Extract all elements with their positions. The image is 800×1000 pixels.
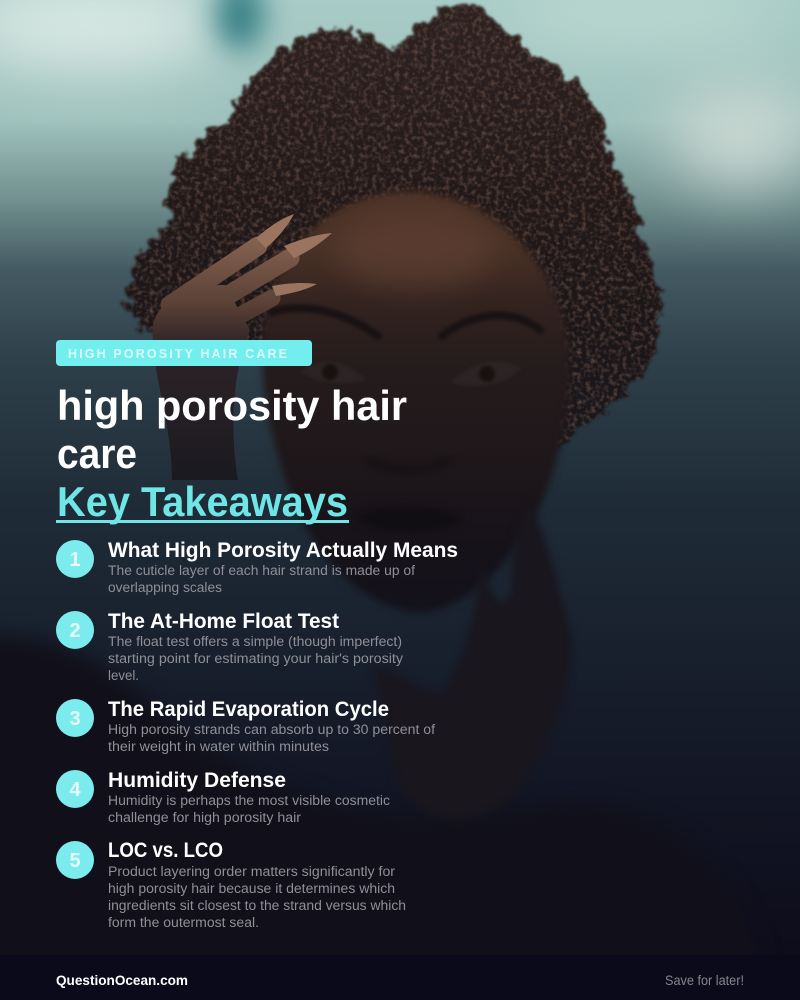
title: Key Takeaways (57, 478, 348, 525)
description 4: Humidity is perhaps the most visible cosmetic (108, 793, 390, 808)
description 3: High porosity strands can absorb up to 30 percent of (108, 722, 435, 737)
eyebrows (272, 308, 540, 336)
number badge 5 (56, 841, 94, 879)
number badge 4: 4 (69, 779, 81, 801)
fingers (170, 246, 290, 332)
takeaway 3 (56, 698, 435, 754)
description 5 (108, 864, 406, 930)
title: care (57, 430, 137, 477)
lips (352, 506, 466, 534)
heading 5: LOC vs. LCO (108, 839, 223, 862)
palm and wrist (153, 285, 250, 480)
nose (362, 458, 455, 474)
tag pill (56, 340, 312, 366)
footer bar (0, 955, 800, 1000)
description 1: The cuticle layer of each hair strand is made up of (108, 563, 415, 578)
shoulders and chest (0, 636, 765, 970)
description 4: challenge for high porosity hair (108, 810, 302, 825)
title: high porosity hair (57, 382, 407, 429)
heading 2: The At-Home Float Test (108, 610, 339, 633)
site name: QuestionOcean.com (56, 972, 188, 988)
description 3 (108, 722, 435, 754)
description 5: high porosity hair because it determines which (108, 881, 395, 896)
description 5: ingredients sit closest to the strand versus which (108, 898, 406, 913)
takeaway 4 (56, 769, 390, 825)
face (262, 192, 569, 612)
hair (127, 6, 661, 445)
description 5: Product layering order matters significantly for (108, 864, 396, 879)
description 3: their weight in water within minutes (108, 739, 329, 754)
forehead highlight (335, 212, 495, 288)
number badge 3 (56, 699, 94, 737)
number badge 3: 3 (69, 708, 81, 730)
description 5: form the outermost seal. (108, 915, 259, 930)
tag pill: HIGH POROSITY HAIR CARE (68, 347, 287, 361)
description 2: level. (108, 668, 139, 683)
heading 4: Humidity Defense (108, 769, 286, 792)
raised hand at the temple (153, 214, 332, 480)
description 2 (108, 634, 403, 683)
takeaway 2 (56, 610, 403, 683)
number badge 2 (56, 611, 94, 649)
heading 1: What High Porosity Actually Means (108, 539, 458, 562)
number badge 5: 5 (69, 850, 81, 872)
number badge 4 (56, 770, 94, 808)
number badge 1 (56, 540, 94, 578)
description 2: starting point for estimating your hair's porosity (108, 651, 403, 666)
number badge 1: 1 (69, 549, 81, 571)
heading 3: The Rapid Evaporation Cycle (108, 698, 389, 721)
lower hand at the jaw (372, 505, 572, 820)
save prompt: Save for later! (665, 973, 744, 988)
eyes (300, 361, 522, 386)
fingernails (256, 214, 332, 296)
description 1: overlapping scales (108, 580, 222, 595)
description 1 (108, 563, 415, 595)
takeaway 5 (56, 839, 406, 930)
title (56, 382, 407, 525)
description 2: The float test offers a simple (though imperfect) (108, 634, 402, 649)
takeaway 1 (56, 539, 458, 595)
description 4 (108, 793, 390, 825)
number badge 2: 2 (69, 620, 81, 642)
